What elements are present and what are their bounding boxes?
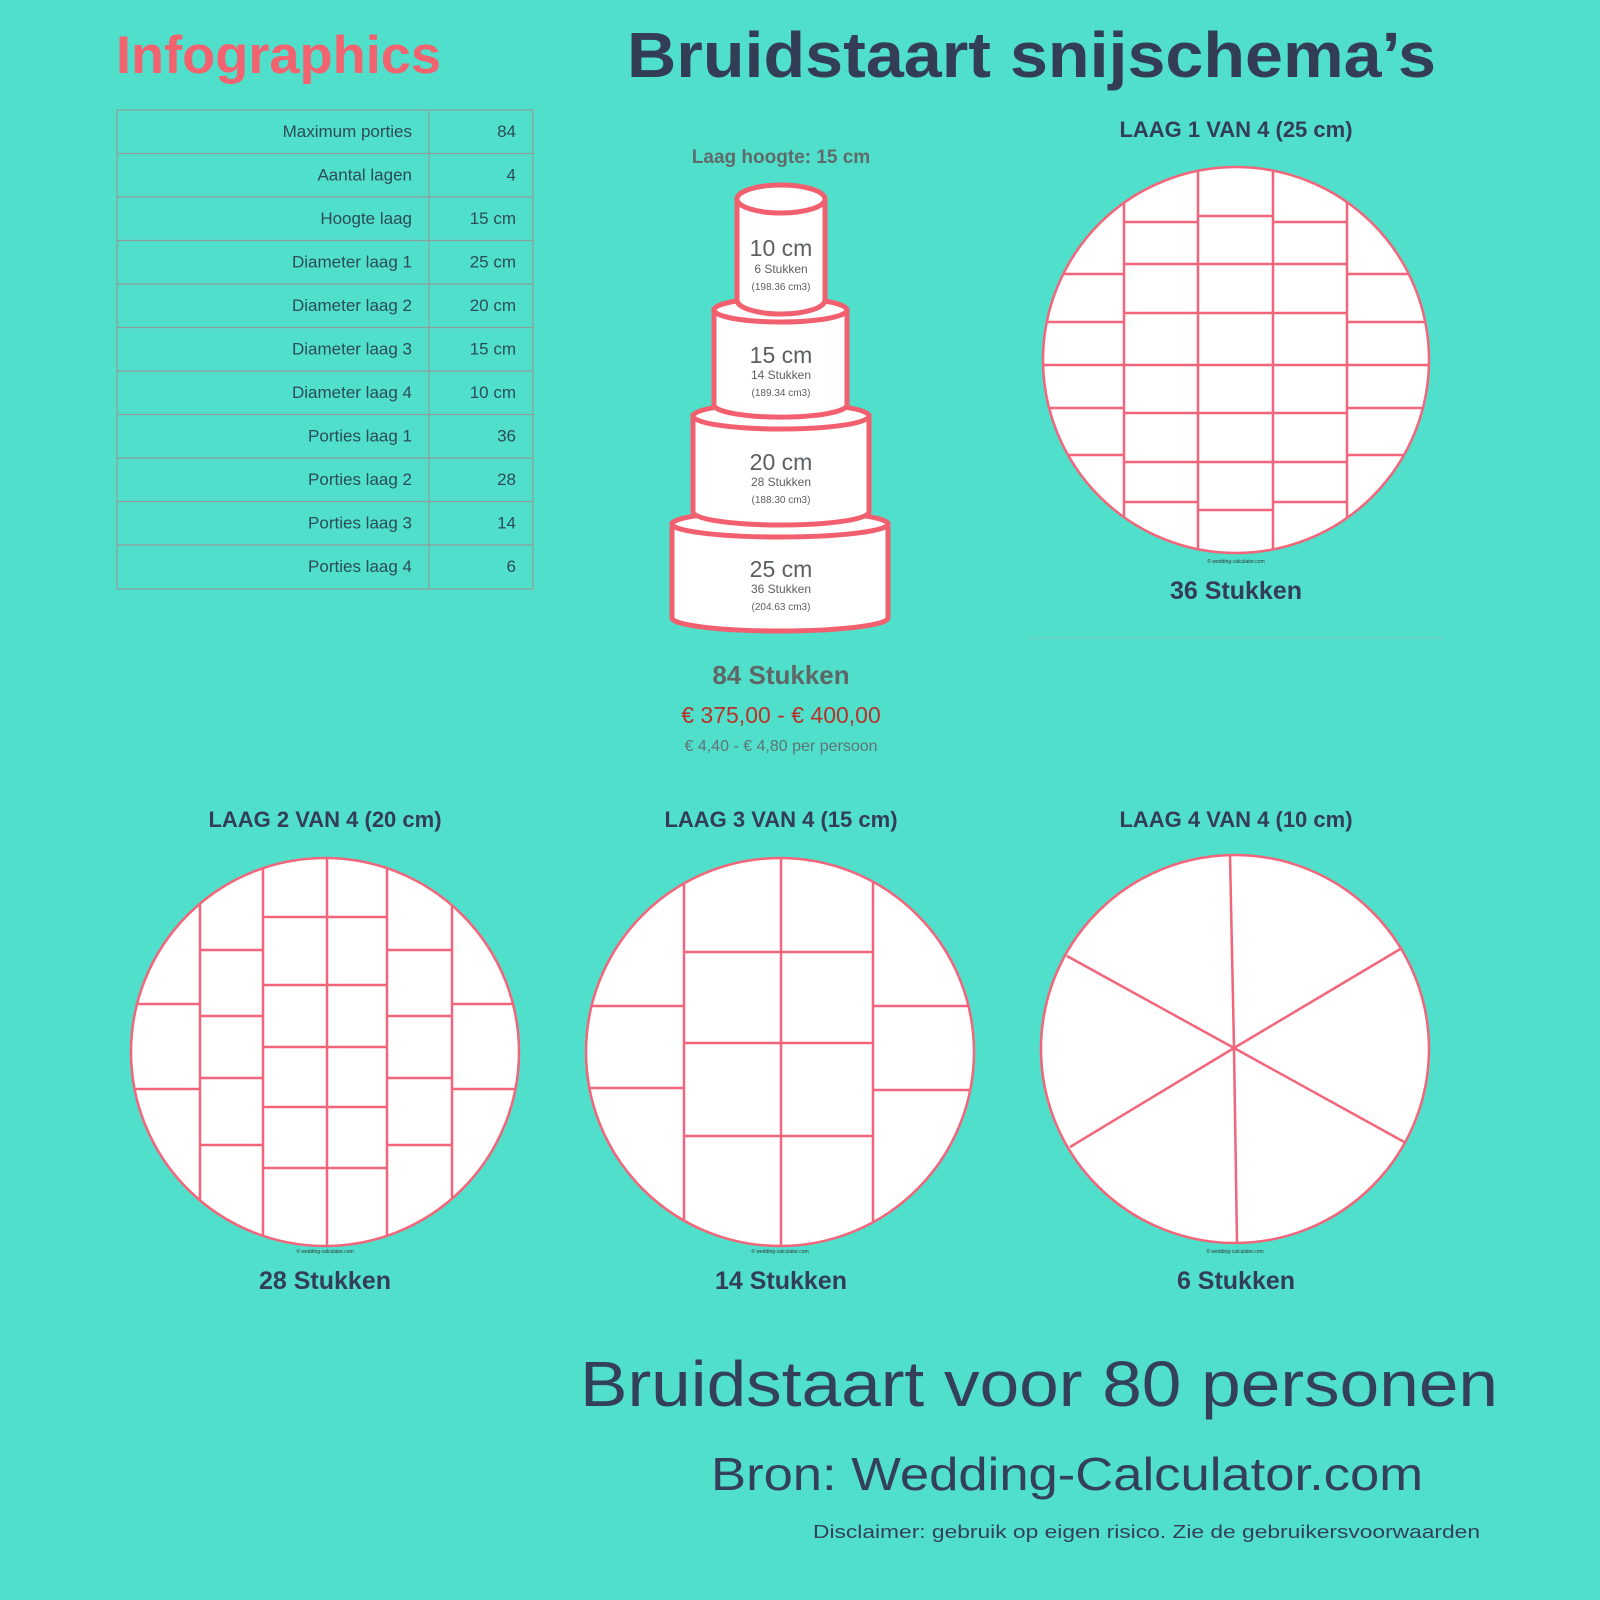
subtitle: persons: Bruidstaart voor 80 personen (580, 1348, 1498, 1420)
diagram: layer 2 cutting: © wedding-calculator.com (296, 1248, 354, 1255)
title: Bruidstaart snijschema’s (627, 19, 1436, 91)
total pieces: 84 Stukken (712, 660, 850, 690)
heading: layer 2: LAAG 2 VAN 4 (20 cm) (208, 807, 442, 832)
cake tier labels: 15 cm (750, 342, 812, 368)
tier 4 (672, 511, 888, 631)
table: cake data: Maximum porties (283, 122, 412, 141)
heading: layer 3: LAAG 3 VAN 4 (15 cm) (664, 807, 898, 832)
table: cake data: Hoogte laag (320, 209, 412, 228)
table: cake data: 36 (497, 426, 516, 446)
table: cake data: 84 (497, 122, 516, 141)
cake tier labels (750, 235, 812, 613)
cake tier labels: 36 Stukken (751, 582, 811, 596)
heading: layer 1: LAAG 1 VAN 4 (25 cm) (1119, 117, 1353, 142)
diagram: layer 1 cutting: © wedding-calculator.com (1207, 558, 1265, 565)
table: cake data: Diameter laag 2 (292, 296, 412, 315)
table: cake data: Aantal lagen (317, 166, 412, 184)
label: layer height: Laag hoogte: 15 cm (692, 147, 870, 168)
heading: Infographics: Infographics (116, 26, 441, 85)
source: Bron: Wedding-Calculator.com (711, 1448, 1423, 1500)
diagram: layer 1 cutting (1040, 160, 1432, 565)
heading: layer 4: LAAG 4 VAN 4 (10 cm) (1119, 807, 1353, 832)
price per person: € 4,40 - € 4,80 per persoon (684, 738, 878, 755)
diagram: layer 2 cutting (128, 850, 522, 1255)
pieces layer 2: 28 Stukken (259, 1267, 391, 1295)
table: cake data: Porties laag 1 (308, 426, 412, 446)
diagram: layer 3 cutting (584, 850, 978, 1255)
cake tier labels: (189.34 cm3) (752, 388, 810, 399)
cake tier labels: (188.30 cm3) (752, 495, 810, 506)
table: cake data (117, 110, 533, 589)
pieces layer 3: 14 Stukken (715, 1267, 847, 1295)
table: cake data: Diameter laag 3 (292, 340, 412, 358)
table: cake data: 14 (497, 514, 516, 532)
pieces layer 4: 6 Stukken (1177, 1267, 1295, 1295)
table: cake data: Diameter laag 4 (292, 383, 412, 402)
cake tier labels: (204.63 cm3) (752, 602, 810, 613)
cake tier labels: (198.36 cm3) (752, 282, 810, 293)
cake tier labels: 10 cm (750, 235, 812, 261)
price: € 375,00 - € 400,00 (681, 702, 881, 728)
cake tier labels: 28 Stukken (751, 475, 811, 489)
table: cake data: Porties laag 3 (308, 514, 412, 532)
tier 1 (737, 185, 825, 314)
disclaimer: Disclaimer: gebruik op eigen risico. Zie de gebruikersvoorwaarden (813, 1522, 1480, 1542)
table: cake data: Porties laag 4 (308, 557, 412, 576)
table: cake data: Porties laag 2 (308, 470, 412, 489)
tier 3 (693, 403, 869, 525)
cake tier labels: 20 cm (750, 449, 812, 475)
diagram: layer 3 cutting: © wedding-calculator.com (751, 1248, 809, 1255)
pieces layer 1: 36 Stukken (1170, 577, 1302, 605)
table: cake data: 10 cm (470, 383, 516, 402)
table: cake data: 6 (507, 557, 516, 576)
table: cake data: 4 (507, 166, 516, 184)
table: cake data: 15 cm (470, 209, 516, 228)
cake tier labels: 14 Stukken (751, 368, 811, 382)
cake tier labels: 6 Stukken (754, 262, 808, 276)
diagram: layer 4 cutting: © wedding-calculator.com (1206, 1248, 1264, 1255)
cake tier labels: 25 cm (750, 556, 812, 582)
table: cake data: 25 cm (470, 252, 516, 272)
tier 2 (714, 298, 847, 417)
table: cake data: 15 cm (470, 340, 516, 358)
table: cake data: 28 (497, 470, 516, 489)
table: cake data: 20 cm (470, 296, 516, 315)
table: cake data: Diameter laag 1 (292, 252, 412, 272)
diagram: layer 4 cutting (1041, 855, 1429, 1255)
cake illustration (672, 185, 888, 631)
